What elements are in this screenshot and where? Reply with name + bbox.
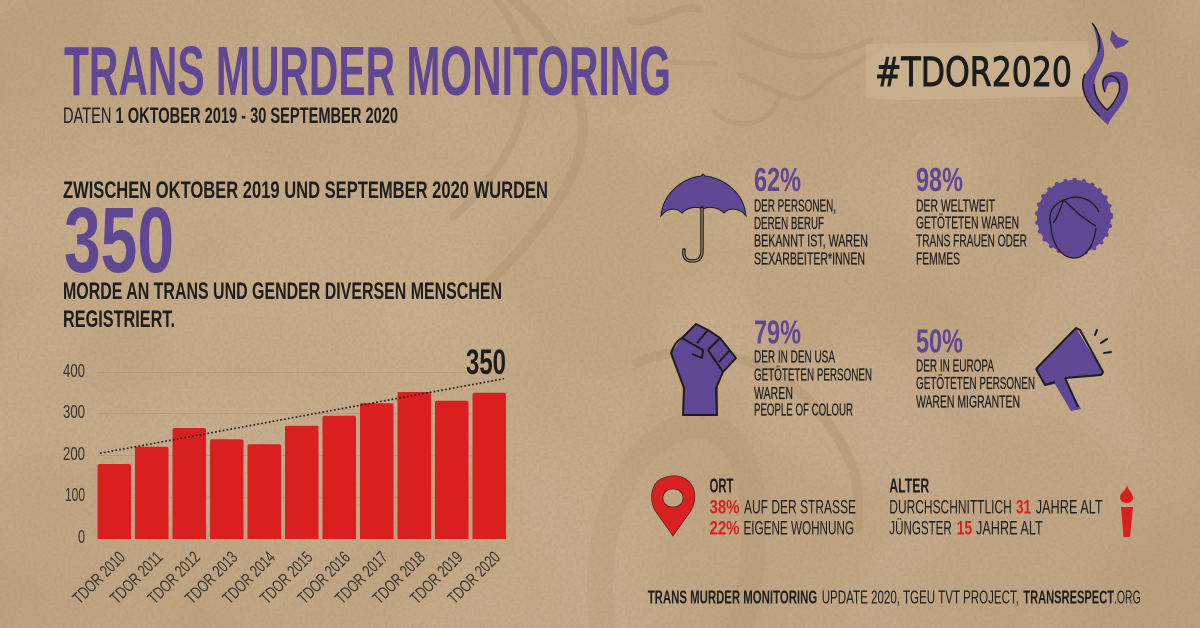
age stats: DURCHSCHNITTLICH [889, 497, 1012, 519]
x axis labels: TDOR 2012 [144, 548, 204, 608]
logo: #TDOR2020 [866, 23, 1129, 125]
icon: torch [1120, 485, 1133, 537]
location stats: EIGENE WOHNUNG [744, 517, 854, 539]
stat: 98% [916, 162, 1027, 268]
y axis labels: 0 [78, 527, 85, 547]
stat: 79%: 79% [754, 314, 801, 351]
x axis labels: TDOR 2010 [69, 548, 129, 608]
age stats: JAHRE ALT [1036, 497, 1103, 519]
date range: DATEN 1 OKTOBER 2019 - 30 SEPTEMBER 2020 [63, 103, 398, 128]
stat: 79%: PEOPLE OF COLOUR [754, 400, 853, 420]
stat: 50%: GETÖTETEN PERSONEN [916, 373, 1035, 393]
stat: 62%: BEKANNT IST, WAREN [754, 231, 868, 251]
y axis labels: 200 [63, 444, 85, 464]
icon: megaphone [1036, 328, 1111, 411]
x axis labels: TDOR 2018 [369, 548, 429, 608]
age stats: JAHRE ALT [976, 517, 1043, 539]
location stats: ORT [710, 476, 734, 498]
stat: 50%: DER IN EUROPA [916, 356, 994, 376]
stat: 79%: GETÖTETEN PERSONEN [754, 365, 872, 385]
chart end value: 350 [466, 343, 506, 382]
stat: 62% [754, 162, 868, 269]
x axis labels: TDOR 2019 [406, 548, 466, 608]
y axis labels: 300 [63, 402, 85, 422]
footer source line: .ORG [1114, 586, 1141, 607]
y axis labels [63, 361, 85, 547]
title: TRANS MURDER MONITORING [64, 32, 671, 110]
intro text continued: MORDE AN TRANS UND GENDER DIVERSEN MENSCHEN [63, 278, 502, 305]
age stats: ALTER [889, 476, 930, 498]
location stats: 22% [710, 517, 740, 539]
stat: 79% [754, 314, 872, 420]
stat: 50% [916, 324, 1035, 412]
bar chart [63, 343, 506, 608]
logo: #TDOR2020: #TDOR2020 [875, 50, 1072, 96]
icon: raised fist [671, 324, 737, 415]
location stats: AUF DER STRASSE [744, 497, 856, 519]
age stats: 31 [1016, 497, 1031, 519]
intro text continued: REGISTRIERT. [63, 306, 175, 333]
intro text continued [63, 278, 502, 333]
intro text line: ZWISCHEN OKTOBER 2019 UND SEPTEMBER 2020 WURDEN [63, 177, 548, 204]
stat: 50%: WAREN MIGRANTEN [916, 392, 1020, 412]
footer source line [648, 586, 1141, 607]
x axis labels: TDOR 2014 [219, 548, 279, 608]
footer source line: TRANS MURDER MONITORING [648, 586, 817, 607]
x axis labels: TDOR 2011 [106, 548, 166, 608]
trend line [100, 379, 504, 453]
icon: afro head [1037, 180, 1111, 258]
x axis labels: TDOR 2013 [181, 548, 241, 608]
x axis labels [69, 548, 504, 608]
big number 350: 350 [64, 188, 174, 292]
y axis labels: 400 [63, 361, 85, 381]
x axis labels: TDOR 2020 [444, 548, 504, 608]
y axis labels: 100 [65, 485, 85, 505]
stat: 98%: DER WELTWEIT [916, 196, 995, 216]
stat: 79%: WAREN [754, 383, 793, 403]
stat: 98%: 98% [916, 162, 963, 199]
x axis labels: TDOR 2017 [331, 548, 391, 608]
footer source line: UPDATE 2020, TGEU TVT PROJECT, [822, 586, 1019, 607]
location stats: 38% [710, 497, 740, 519]
icon: location pin [652, 476, 695, 536]
stat: 62%: 62% [754, 162, 801, 199]
x axis labels: TDOR 2016 [294, 548, 354, 608]
icon: umbrella [661, 174, 746, 261]
stat: 98%: GETÖTETEN WAREN [916, 213, 1019, 233]
age stats: 15 [957, 517, 972, 539]
stat: 98%: FEMMES [916, 248, 960, 268]
stat: 79%: DER IN DEN USA [754, 347, 835, 367]
location stats [710, 476, 856, 539]
stat: 62%: DER PERSONEN, [754, 196, 836, 216]
stat: 62%: SEXARBEITER*INNEN [754, 249, 865, 269]
stat: 62%: DEREN BERUF [754, 213, 824, 233]
footer source line: TRANSRESPECT [1023, 586, 1114, 607]
bars [98, 392, 506, 539]
age stats: JÜNGSTER [889, 517, 952, 539]
stat: 50%: 50% [916, 324, 963, 361]
x axis labels: TDOR 2015 [256, 548, 316, 608]
stat: 98%: TRANS FRAUEN ODER [916, 230, 1027, 250]
age stats [889, 476, 1103, 539]
